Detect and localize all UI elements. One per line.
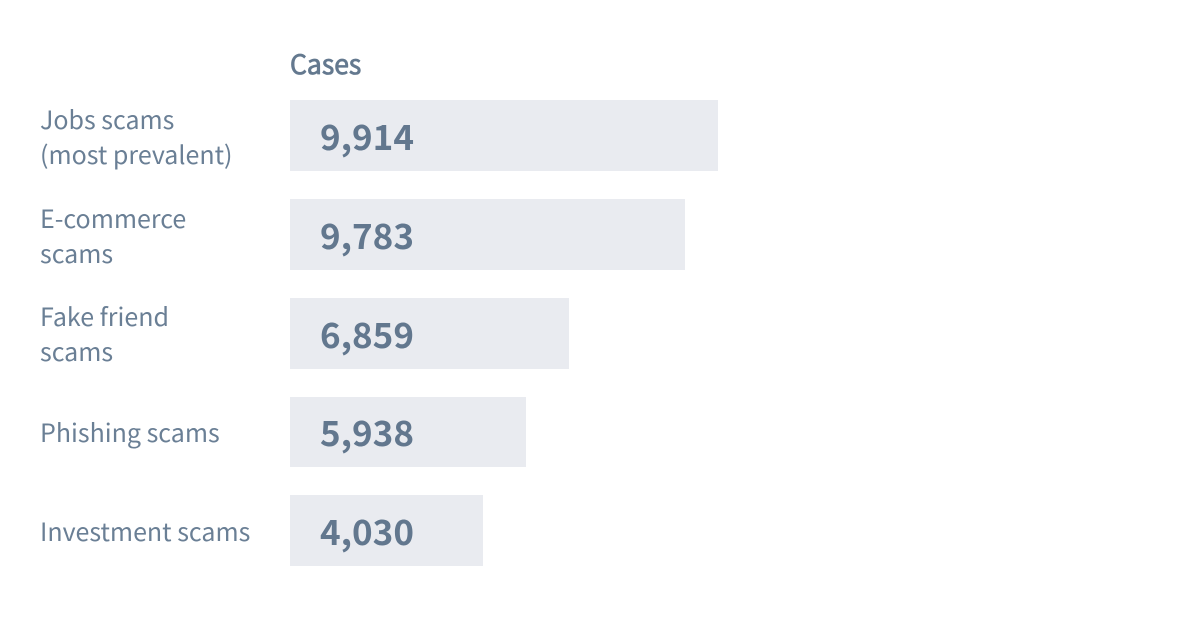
label: jobs scams	[40, 101, 232, 172]
bar: fake friend scams	[290, 298, 569, 369]
label: fake friend scams: scams	[40, 333, 113, 369]
label: investment scams: Investment scams	[40, 513, 250, 549]
label: e-commerce scams: E-commerce	[40, 200, 186, 236]
column heading: Cases	[290, 43, 361, 82]
bar: jobs scams	[290, 100, 718, 171]
bar: fake friend scams: 6,859	[320, 308, 414, 359]
label: e-commerce scams: scams	[40, 235, 113, 271]
label: jobs scams: (most prevalent)	[40, 136, 232, 172]
bar: e-commerce scams: 9,783	[320, 209, 414, 260]
label: phishing scams: Phishing scams	[40, 414, 220, 450]
bar: jobs scams: 9,914	[320, 110, 414, 161]
bar: phishing scams: 5,938	[320, 406, 414, 457]
label: fake friend scams: Fake friend	[40, 298, 169, 334]
bar: phishing scams	[290, 397, 526, 467]
bar: investment scams: 4,030	[320, 505, 414, 556]
label: fake friend scams	[40, 298, 169, 369]
label: jobs scams: Jobs scams	[40, 101, 174, 137]
bar: e-commerce scams	[290, 199, 684, 270]
label: e-commerce scams	[40, 200, 186, 271]
bar: investment scams	[290, 495, 483, 566]
